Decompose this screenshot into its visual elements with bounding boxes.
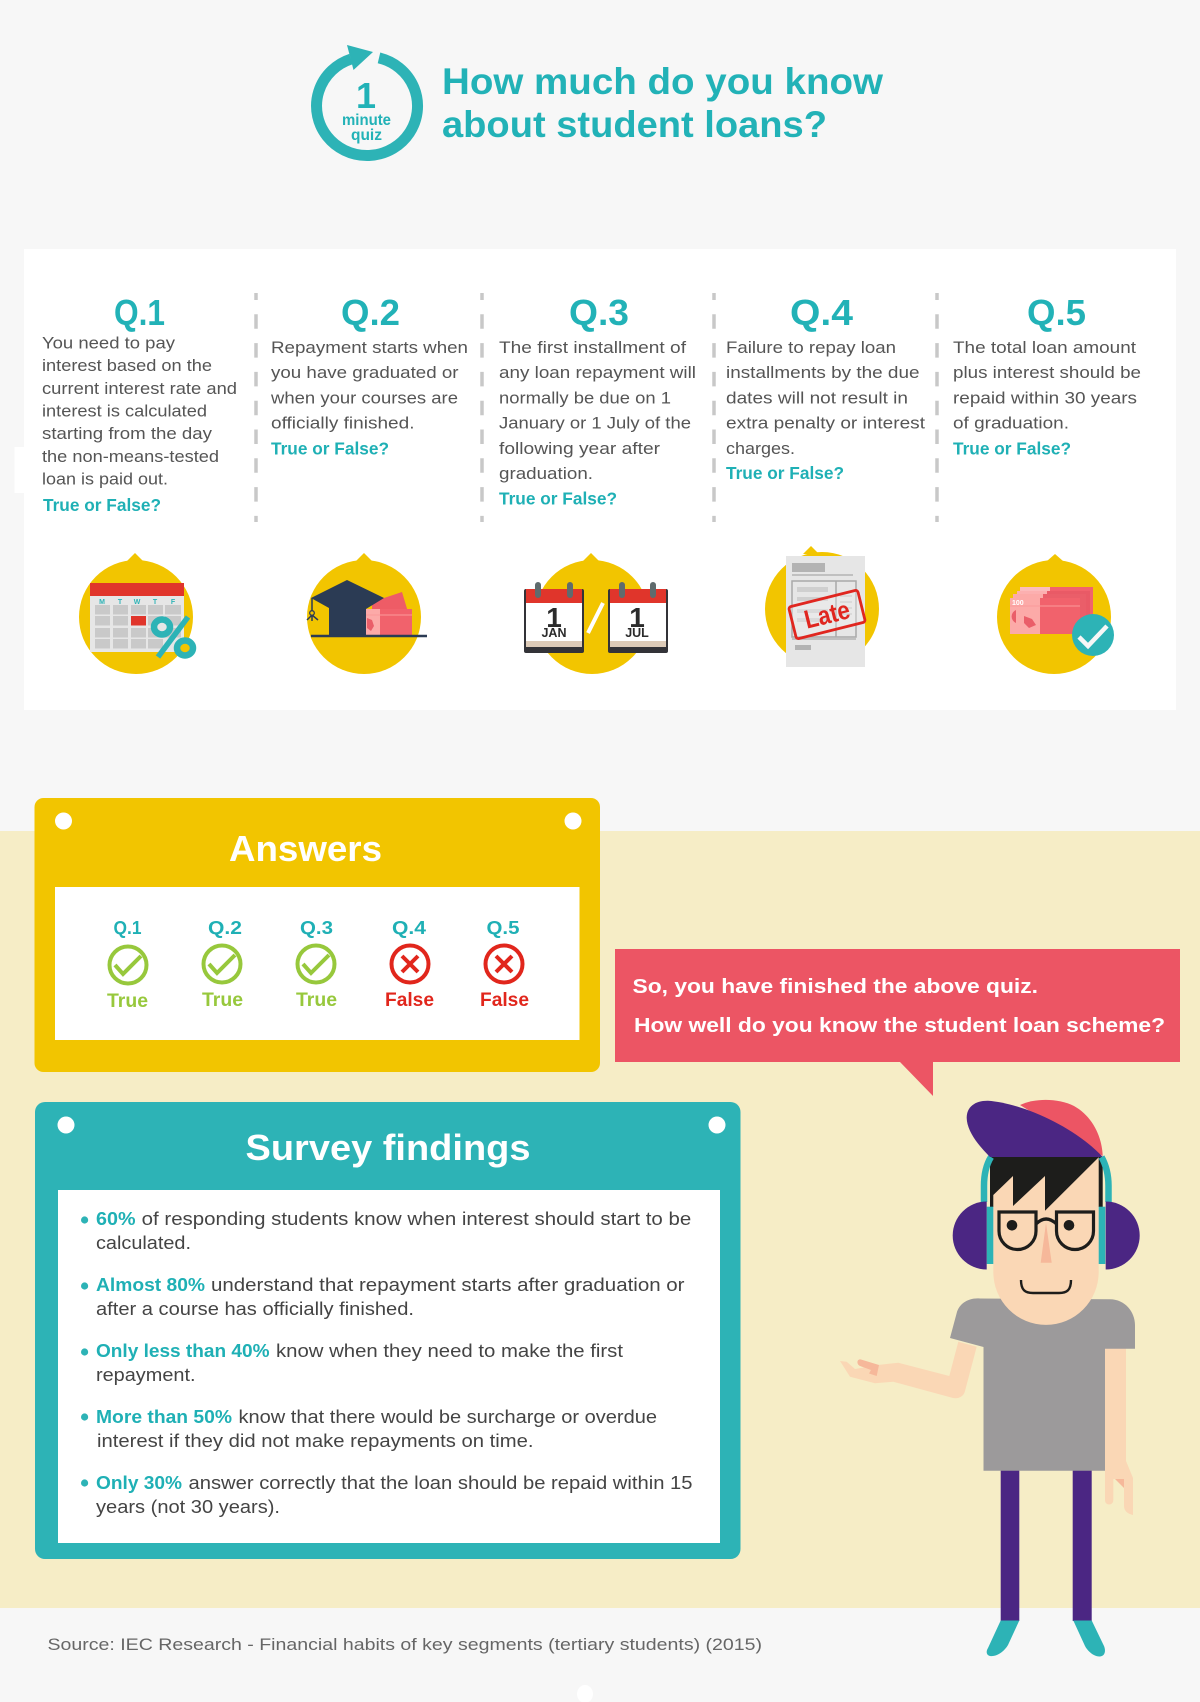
callout: speech bubble: How well do you know the student loan scheme? <box>634 1015 1165 1037</box>
finding 2 <box>81 1275 684 1319</box>
question 1: starting from the day <box>42 424 213 443</box>
question 2: officially finished. <box>271 414 414 432</box>
callout: speech bubble: So, you have finished the above quiz. <box>632 976 1038 998</box>
finding 2: after a course has officially finished. <box>96 1299 414 1319</box>
title: How much do you know <box>442 61 883 102</box>
answer Q.4: Q.4 <box>392 917 427 938</box>
question 1: current interest rate and <box>42 379 237 398</box>
calendar: 1 January: 1 <box>546 602 562 633</box>
survey heading: Survey findings <box>246 1127 530 1168</box>
calendar: 1 July: 1 <box>629 602 645 633</box>
question 4: installments by the due <box>726 363 920 382</box>
finding 3: know when they need to make the first <box>276 1341 623 1361</box>
question 4: Q.4 <box>790 292 853 333</box>
finding 5: years (not 30 years). <box>96 1497 280 1517</box>
icon: calendar with percent <box>79 553 193 674</box>
question 2: when your courses are <box>270 388 458 408</box>
question 5: The total loan amount <box>953 338 1136 357</box>
question 3: January or 1 July of the <box>499 414 691 432</box>
icon: calendar with percent: F <box>171 599 176 606</box>
smile <box>1021 1280 1071 1293</box>
finding 5: Only 30% <box>96 1473 182 1493</box>
quiz timer badge: 1 <box>356 75 376 116</box>
finding 4: interest if they did not make repayments on time. <box>97 1431 534 1451</box>
answer Q.1 <box>107 917 148 1012</box>
finding 1: 60% <box>96 1209 136 1229</box>
hair <box>990 1157 1099 1211</box>
question 3: Q.3 <box>569 292 629 333</box>
answer Q.3 <box>296 917 337 1011</box>
question 3: True or False? <box>499 488 617 508</box>
question 4: dates will not result in <box>726 388 908 408</box>
t-shirt <box>950 1298 1135 1471</box>
question 5: plus interest should be <box>953 363 1141 382</box>
panel: survey findings <box>35 1102 740 1559</box>
question 1 <box>42 292 237 515</box>
question 2: Repayment starts when <box>271 338 468 357</box>
question 4: Failure to repay loan <box>726 338 896 357</box>
finding 1: of responding students know when interest should start to be <box>142 1209 691 1229</box>
legs <box>1001 1470 1092 1621</box>
calendar: 1 July: JUL <box>625 626 649 640</box>
answer Q.5: Q.5 <box>486 917 520 938</box>
quiz timer badge <box>317 45 418 155</box>
cap <box>967 1100 1103 1157</box>
finding 3: repayment. <box>96 1365 196 1385</box>
question 4 <box>726 292 925 483</box>
question 5: of graduation. <box>953 414 1069 432</box>
icon: two calendars <box>524 553 668 674</box>
title: about student loans? <box>442 104 827 145</box>
answer Q.4 <box>385 917 434 1011</box>
glasses <box>999 1212 1094 1250</box>
finding 2: Almost 80% <box>96 1275 205 1295</box>
right arm and hand <box>1105 1345 1133 1515</box>
question 3: The first installment of <box>499 338 686 357</box>
question 1: interest based on the <box>42 356 212 375</box>
question 1: Q.1 <box>114 292 165 333</box>
calendar: 1 July <box>608 582 668 653</box>
finding 4: More than 50% <box>96 1407 232 1427</box>
finding 3: Only less than 40% <box>96 1341 270 1361</box>
cream background band <box>0 831 1200 1608</box>
question 1: True or False? <box>43 495 161 515</box>
finding 5: answer correctly that the loan should be repaid within 15 <box>188 1473 692 1493</box>
question 3: following year after <box>499 439 660 458</box>
question 4: charges. <box>726 439 795 458</box>
panel: answers <box>34 798 600 1072</box>
icon: calendar with percent: M <box>99 599 105 606</box>
finding 4: know that there would be surcharge or overdue <box>238 1407 657 1427</box>
late stamp: Late <box>801 594 853 635</box>
icon: graduation cap and money <box>307 553 427 674</box>
question 1: the non-means-tested <box>42 447 219 466</box>
question 2: you have graduated or <box>271 363 459 382</box>
finding 3 <box>81 1341 623 1385</box>
finding 5 <box>81 1473 692 1517</box>
calendar: 1 January <box>524 582 584 653</box>
answer Q.1: True <box>107 990 148 1012</box>
answer Q.1: Q.1 <box>114 917 142 938</box>
quiz timer badge: quiz <box>351 127 382 144</box>
answer Q.3: Q.3 <box>300 917 333 938</box>
icon: calendar with percent: W <box>134 599 141 606</box>
question 3: any loan repayment will <box>499 363 696 382</box>
question 5 <box>953 292 1141 458</box>
icon: calendar with percent: T <box>153 599 158 606</box>
question 5: repaid within 30 years <box>953 388 1137 408</box>
question 5: Q.5 <box>1027 292 1086 333</box>
quiz timer badge: minute <box>342 112 391 129</box>
question 5: True or False? <box>953 438 1071 458</box>
answer Q.2: Q.2 <box>208 917 242 938</box>
nose <box>1041 1223 1052 1263</box>
finding 1: calculated. <box>96 1233 191 1253</box>
callout: speech bubble <box>615 949 1180 1096</box>
icon: late bill <box>765 546 879 667</box>
answer Q.5: False <box>480 989 529 1011</box>
headphones <box>953 1157 1140 1270</box>
answer Q.2: True <box>202 989 243 1011</box>
question 2: True or False? <box>271 438 389 458</box>
title <box>442 61 883 145</box>
answer Q.3: True <box>296 989 337 1011</box>
face <box>993 1157 1099 1325</box>
question 1: interest is calculated <box>42 402 207 420</box>
answer Q.4: False <box>385 989 434 1011</box>
answer Q.2 <box>202 917 243 1011</box>
answers heading: Answers <box>229 828 382 869</box>
icon: calendar with percent: T <box>118 599 123 606</box>
question 3: normally be due on 1 <box>499 388 671 408</box>
calendar: 1 January: JAN <box>541 626 567 640</box>
question 2 <box>270 292 468 458</box>
icon: banknotes with check <box>997 554 1114 674</box>
question 1: You need to pay <box>42 334 176 352</box>
question 4: True or False? <box>726 463 844 483</box>
question 3: graduation. <box>499 464 593 483</box>
finding 2: understand that repayment starts after graduation or <box>211 1275 684 1295</box>
question 4: extra penalty or interest <box>726 414 925 432</box>
shoes <box>987 1620 1105 1657</box>
finding 1 <box>81 1209 691 1253</box>
panel: quiz questions <box>14 249 1176 710</box>
answer Q.5 <box>480 917 529 1011</box>
source note: Source: IEC Research - Financial habits of key segments (tertiary students) (2015) <box>48 1635 762 1654</box>
question 3 <box>499 292 696 508</box>
illustration: student character <box>840 1100 1140 1657</box>
left arm and hand <box>840 1342 977 1398</box>
question 2: Q.2 <box>341 292 400 333</box>
icon: banknotes with check: 100 <box>1012 600 1024 607</box>
question 1: loan is paid out. <box>42 470 168 488</box>
finding 4 <box>81 1407 657 1451</box>
